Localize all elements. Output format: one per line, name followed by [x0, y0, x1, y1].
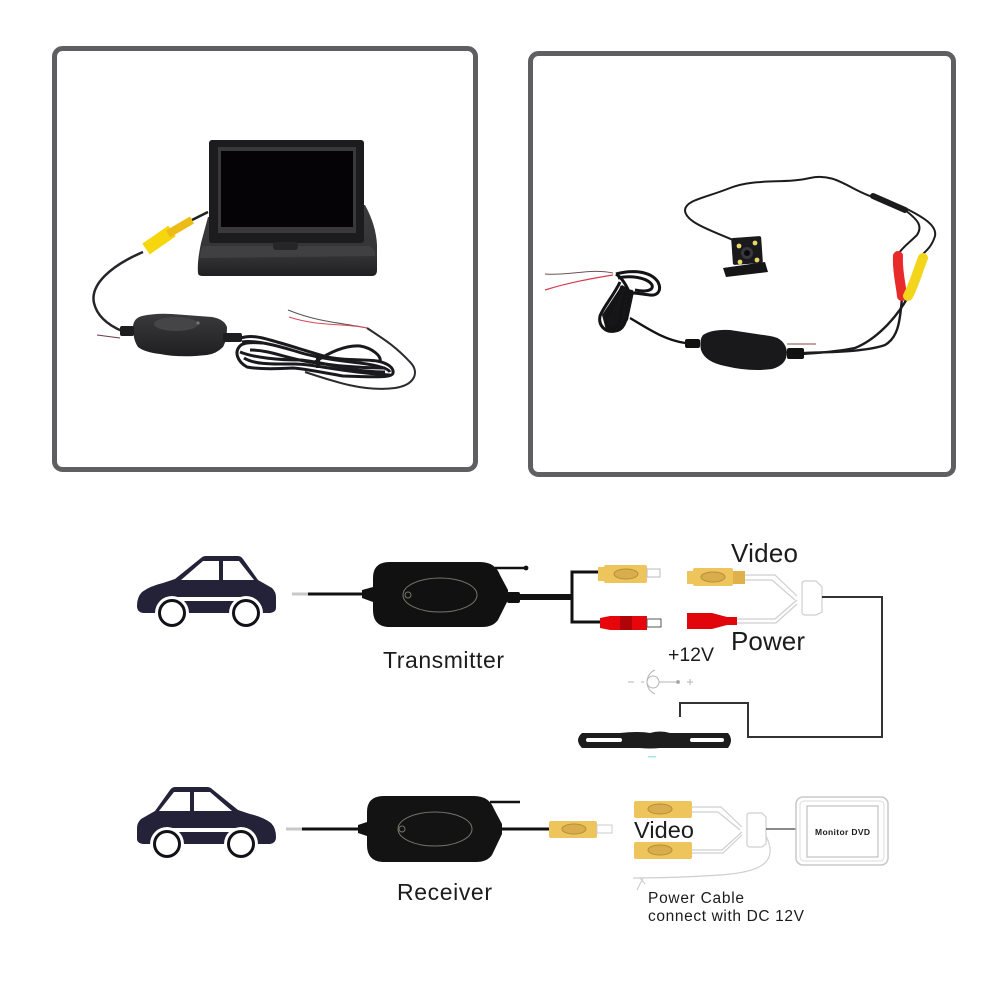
yellow RCA plug: transmitter	[598, 565, 660, 583]
transmitter box	[362, 562, 528, 627]
cyan mark	[648, 756, 656, 758]
coiled power cable with bare wires	[237, 310, 415, 389]
split output wires	[508, 572, 600, 622]
monitor DVD box	[796, 797, 888, 865]
receiver box	[358, 796, 550, 862]
licence plate camera	[578, 732, 731, 748]
DC polarity symbol	[628, 670, 693, 694]
camera cable	[685, 177, 935, 354]
lower video plug	[634, 842, 692, 859]
cable and yellow connector	[93, 212, 208, 338]
monitor lead cables and junction	[633, 807, 770, 890]
yellow plug: camera lead	[687, 568, 745, 586]
car: transmitter side	[137, 556, 276, 630]
upper video plug	[634, 801, 692, 818]
panel: monitor photo	[54, 48, 476, 470]
wireless module	[120, 314, 242, 356]
monitor with stand	[198, 140, 377, 276]
power cable note	[648, 890, 805, 925]
label: Receiver: Receiver	[397, 879, 492, 905]
receiver input wire	[286, 828, 358, 830]
label: Power: Power	[731, 626, 805, 656]
wireless module	[685, 330, 816, 370]
label: Monitor DVD: Monitor DVD	[815, 827, 870, 837]
panel: camera photo	[530, 54, 954, 474]
camera lead cables and junction	[737, 575, 822, 623]
label: Video: Video	[634, 817, 694, 843]
red plug: camera lead	[687, 613, 737, 629]
yellow RCA plug: receiver	[549, 821, 612, 838]
camera wire	[680, 597, 882, 737]
red plug: transmitter	[600, 616, 661, 630]
red and yellow plugs	[898, 256, 923, 296]
label: Video: Video	[731, 538, 798, 568]
label: +12V: +12V	[668, 644, 714, 666]
inline splitter	[873, 196, 905, 210]
cable coil and bare wires	[545, 271, 685, 343]
power cable note: connect with DC 12V	[648, 908, 805, 925]
label: Transmitter: Transmitter	[383, 647, 504, 673]
rear camera	[723, 236, 768, 277]
power cable note: Power Cable	[648, 890, 744, 907]
transmitter input wire	[292, 592, 362, 596]
car: receiver side	[137, 787, 276, 861]
